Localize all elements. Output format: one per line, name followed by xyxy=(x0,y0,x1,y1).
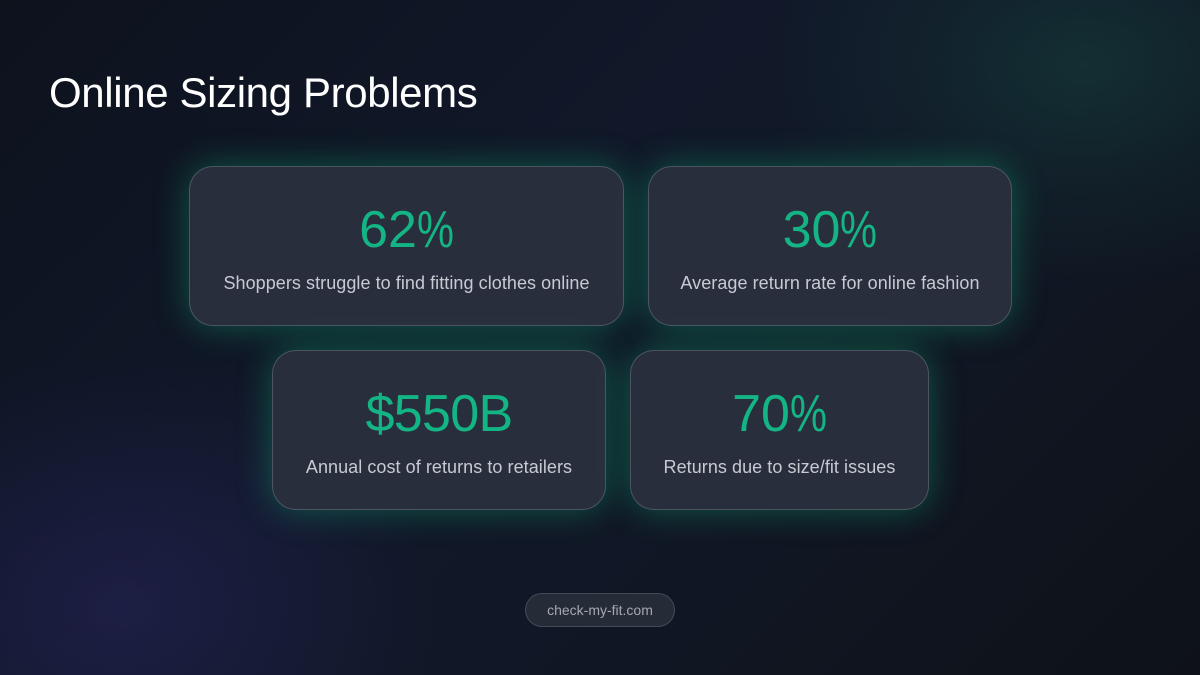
stat: 70%: 70 xyxy=(732,385,790,443)
stat: 62% xyxy=(359,201,454,259)
stat: $550B: $550B xyxy=(366,385,512,443)
panel: shoppers stat xyxy=(189,166,624,326)
stat: 62%: % xyxy=(417,201,454,259)
label: shoppers: Shoppers struggle to find fitting clothes online xyxy=(223,273,590,293)
title: Online Sizing Problems xyxy=(49,69,477,116)
stat: 62%: 62 xyxy=(359,201,417,259)
stat: 70%: % xyxy=(790,385,827,443)
label: size issues: Returns due to size/fit issues xyxy=(664,457,895,477)
stat: 30% xyxy=(783,201,877,259)
label: return rate: Average return rate for online fashion xyxy=(680,273,980,293)
website pill: check-my-fit.com xyxy=(547,602,653,618)
label: annual cost: Annual cost of returns to retailers xyxy=(306,457,572,477)
stat: 30%: 30 xyxy=(783,201,840,259)
stat: 70% xyxy=(732,385,827,443)
panel: size issues stat xyxy=(630,350,929,510)
website pill xyxy=(525,593,675,627)
panel: return rate stat xyxy=(648,166,1012,326)
stat: 30%: % xyxy=(840,201,877,259)
panel: annual cost stat xyxy=(272,350,606,510)
